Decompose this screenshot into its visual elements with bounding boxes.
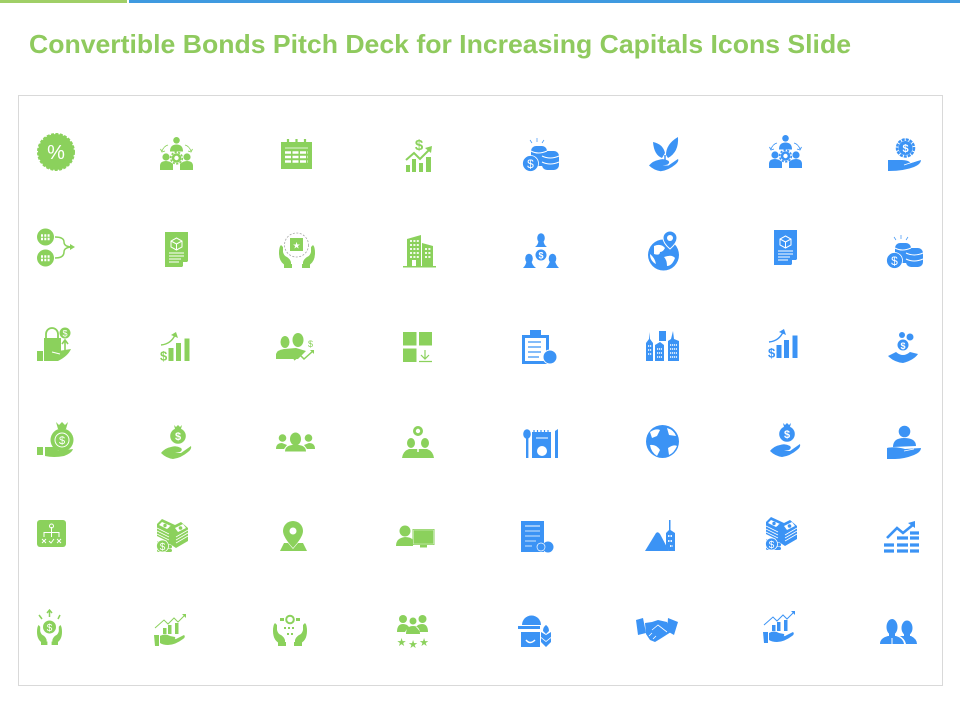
icon: bar chart with arrow: [768, 329, 798, 360]
icon: banknotes and coins: [156, 519, 188, 553]
icon: merging flow: [37, 228, 75, 266]
icon: hand with chart: [154, 614, 186, 646]
icon: three people and dollar: [523, 233, 559, 268]
icon: dollar growth chart: [406, 137, 432, 172]
icon: group of people: [276, 432, 315, 452]
icon: hands with gear and stars: [273, 616, 307, 646]
icon: mountain and tower: [645, 520, 675, 551]
icon: falling coins on hand: $: [900, 341, 906, 351]
icon: decision tree card: [37, 520, 66, 547]
icon: hands with dollar and arrows: [37, 610, 62, 645]
icon: team with stars: ★: [397, 637, 407, 649]
icon: person with monitor: [396, 526, 434, 548]
icon: three people and dollar: $: [538, 250, 544, 260]
icon: city skyline: [646, 331, 679, 361]
icon: team with stars: [397, 615, 429, 651]
icon: plant in hand: [649, 137, 678, 171]
icon: grid with download: [403, 332, 432, 362]
icon: padlock on hand: $: [62, 328, 68, 338]
icon: business people growth: [276, 333, 314, 360]
icon: gear above two people: [402, 427, 434, 458]
icon: percent badge: %: [47, 142, 65, 164]
title: Convertible Bonds Pitch Deck for Increasing Capitals Icons Slide: [29, 29, 851, 59]
icon: banknotes and coins: [766, 517, 797, 551]
icon: coins stack: [886, 235, 923, 268]
icon: money bag on hand: $: [59, 435, 65, 447]
icon: clipboard with apple: [522, 330, 557, 364]
icon: grain jar with wheat: [518, 616, 551, 647]
icon: money bag on hand: [161, 425, 191, 459]
icon: document with box: [774, 230, 797, 265]
icon: location pin on map: [280, 521, 307, 551]
icon: money bag on hand: [770, 423, 800, 457]
icon: hands protecting star: ★: [292, 240, 301, 250]
top accent bars: [0, 0, 960, 3]
icon: team with stars: ★: [419, 637, 429, 649]
icon: office buildings: [403, 235, 436, 268]
icon: bar chart with arrow: [160, 332, 190, 364]
icon: money bag on hand: [37, 422, 74, 457]
icon: globe with location pin: [648, 231, 679, 270]
icon: hands protecting star: [279, 233, 315, 268]
panel: icon grid frame: [18, 96, 942, 686]
icon: document with box: [165, 232, 188, 267]
icon: clipboard with fruit: [521, 521, 554, 552]
icon: coins stack: [522, 138, 559, 172]
icon: calendar: [281, 139, 312, 169]
icon: gear coin in hand: $: [902, 143, 909, 155]
icon: gear coin in hand: [888, 140, 921, 171]
icon: team with stars: ★: [408, 639, 418, 651]
icon: hands with dollar and arrows: $: [47, 623, 53, 634]
icon: globe: [646, 425, 679, 458]
icon: falling coins on hand: [888, 332, 918, 363]
icon: padlock on hand: [37, 328, 71, 361]
icon: percent badge: [38, 134, 74, 170]
icon: two business people: [880, 619, 917, 644]
icon: team with gear: [769, 135, 802, 168]
icon: hand with chart: [763, 611, 795, 643]
icon: business people growth: $: [308, 339, 313, 349]
icon: person on hand: [887, 426, 921, 459]
icon: dollar growth chart: $: [415, 137, 424, 154]
icon: diet notebook with cutlery: [523, 429, 558, 458]
icon: team with gear: [160, 137, 193, 170]
icon: handshake: [636, 618, 678, 642]
icon: growth arrow over stacks: [884, 521, 919, 551]
